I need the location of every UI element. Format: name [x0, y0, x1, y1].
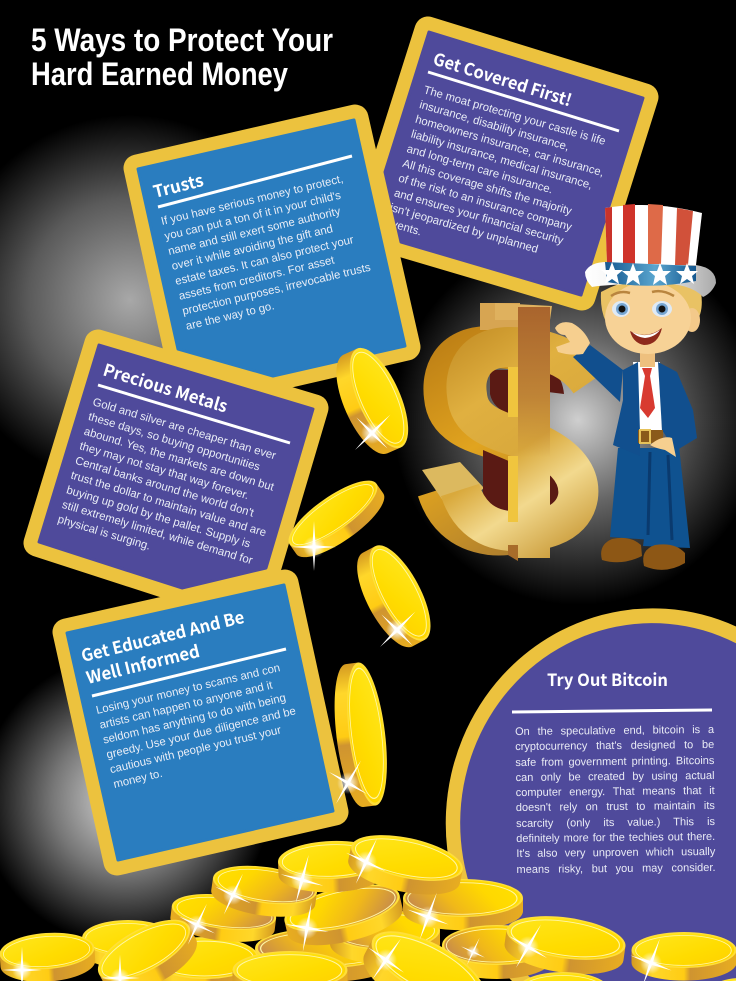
- body text: get educated: artists can happen to anyone and it: [98, 679, 275, 732]
- body text: try out bitcoin: means risky, but you may consider.: [516, 862, 716, 876]
- body text: get educated: Losing your money to scams and con: [95, 662, 281, 717]
- body text: precious metals: these days, so buying opportunities: [87, 411, 262, 474]
- body text: trusts: you can put a ton of it in your child's: [163, 190, 342, 243]
- mouth: [630, 328, 662, 345]
- body text: get covered first: insurance, disability insurance,: [418, 99, 570, 153]
- body text: trusts: If you have serious money to protect,: [160, 173, 344, 228]
- body text: get educated: greedy. Use your due diligence and be: [105, 705, 297, 761]
- body text: get educated: [95, 661, 304, 791]
- body text: precious metals: [56, 396, 289, 583]
- body text: precious metals: Gold and silver are cheaper than ever: [91, 396, 277, 462]
- body text: try out bitcoin: [515, 724, 716, 876]
- heading: trusts: Trusts: [150, 166, 206, 203]
- heading: get covered first: Get Covered First!: [431, 45, 575, 111]
- hat band with stars: [601, 262, 698, 286]
- body text: trusts: estate taxes. It can also protect your: [174, 234, 355, 288]
- body text: trusts: assets from creditors. For asset: [178, 254, 336, 303]
- panel: get educated: [66, 583, 335, 862]
- shoes: [601, 538, 685, 570]
- body text: try out bitcoin: safe from government printing. Bitcoins: [515, 755, 714, 769]
- belt: [638, 430, 663, 443]
- body text: precious metals: physical is surging.: [56, 514, 152, 553]
- heading: get educated and be well informed: Well Informed: [83, 637, 202, 689]
- shirt and tie: [633, 362, 662, 432]
- jacket: [573, 345, 697, 456]
- falling coin 1: [324, 340, 420, 466]
- body text: try out bitcoin: On the speculative end, bitcoin is a: [515, 724, 714, 738]
- eyes: [611, 291, 674, 317]
- hair back: [601, 278, 702, 322]
- panel: precious metals: [37, 343, 315, 590]
- icon: gold dollar sign: [422, 303, 590, 561]
- body text: try out bitcoin: cryptocurrency that's designed to be: [515, 739, 714, 753]
- body text: precious metals: buying up gold by the pallet. Supply is: [65, 484, 252, 551]
- panel: trusts: [137, 118, 407, 378]
- neck: [640, 345, 655, 367]
- body text: get educated: seldom has anything to do with being: [102, 692, 287, 747]
- heading: get educated and be well informed: Get Educated And Be: [78, 603, 247, 667]
- divider: trusts: [158, 156, 352, 207]
- body text: trusts: [160, 172, 376, 333]
- body text: try out bitcoin: scarcity (only its value.) This is: [516, 816, 715, 830]
- coin sparkles: [2, 829, 681, 981]
- body text: get educated: cautious with people you trust your: [109, 724, 283, 776]
- body text: get covered first: liability insurance, medical insurance,: [410, 128, 594, 192]
- body text: get covered first: homeowners insurance, car insurance,: [414, 114, 605, 179]
- hat crown stripes: [605, 204, 702, 265]
- falling coin 4: [317, 660, 394, 815]
- body text: precious metals: they may not stay that way forever.: [78, 440, 250, 502]
- title: Hard Earned Money: [31, 56, 288, 92]
- illustration: uncle sam boy: [555, 204, 716, 570]
- heading: precious metals: Precious Metals: [101, 356, 231, 417]
- body text: get educated: money to.: [112, 768, 164, 791]
- coin pile: [0, 827, 736, 981]
- hat brim: [585, 262, 716, 297]
- body text: precious metals: abound. Yes, the markets are down but: [82, 426, 276, 494]
- body text: trusts: are the way to go.: [185, 300, 276, 333]
- body text: try out bitcoin: definitely more for the techies out there.: [516, 831, 715, 845]
- title: [31, 22, 333, 92]
- divider: educated: [92, 649, 286, 696]
- body text: try out bitcoin: It's also very unproven which usually: [516, 846, 715, 860]
- falling coin 3: [345, 537, 443, 663]
- body text: get covered first: isn't jeopardized by unplanned: [388, 202, 539, 256]
- body text: precious metals: trust the dollar to maintain value and are: [69, 470, 268, 539]
- face: [605, 282, 691, 354]
- body text: get covered first: [391, 86, 605, 253]
- body text: trusts: name and still exert some authority: [167, 206, 342, 258]
- heading: try out bitcoin: Try Out Bitcoin: [547, 666, 668, 691]
- divider: bitcoin: [512, 710, 712, 712]
- body text: get covered first: and ensures your financial security: [393, 187, 565, 247]
- panel: try out bitcoin: [446, 608, 736, 981]
- legs: [610, 446, 690, 548]
- divider: covered: [428, 72, 619, 131]
- divider: precious: [98, 385, 290, 443]
- body text: get covered first: of the risk to an insurance company: [397, 173, 573, 234]
- body text: get covered first: events.: [384, 217, 423, 238]
- body text: get covered first: and long-term care insurance.: [405, 143, 554, 196]
- body text: try out bitcoin: computer energy. That means that it: [516, 785, 715, 799]
- ear: [684, 308, 700, 332]
- hands: [555, 322, 676, 457]
- body text: get covered first: All this coverage shifts the majority: [401, 158, 573, 218]
- body text: precious metals: Central banks around the world don't: [74, 455, 256, 520]
- body text: trusts: over it while avoiding the gift and: [171, 223, 334, 273]
- body text: try out bitcoin: can only be created by using actual: [515, 770, 715, 784]
- body text: try out bitcoin: doesn't rely on trust to maintain its: [516, 800, 715, 814]
- falling coin 2: [280, 470, 393, 571]
- body text: get covered first: The moat protecting your castle is life: [422, 84, 607, 148]
- body text: precious metals: still extremely limited, while demand for: [61, 499, 254, 567]
- body text: trusts: protection purposes, irrevocable trusts: [181, 262, 372, 318]
- title: 5 Ways to Protect Your: [31, 22, 333, 58]
- panel: get covered first: [383, 30, 645, 297]
